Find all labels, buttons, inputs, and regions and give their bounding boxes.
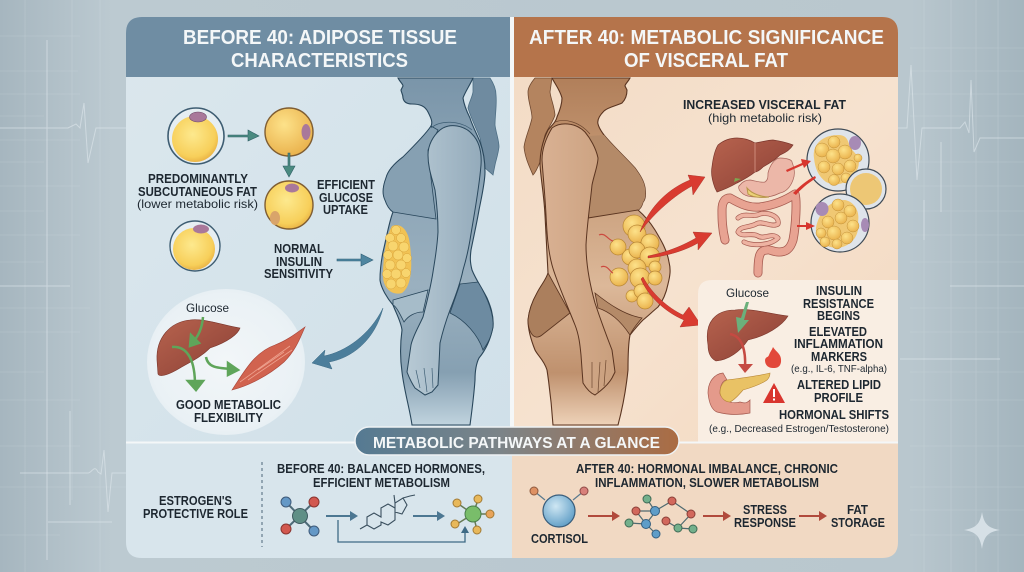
arrow: to inset [312, 308, 383, 369]
icon: intestine [722, 194, 796, 273]
label: fat storage: FAT [847, 503, 868, 517]
label: glucose uptake: GLUCOSE [319, 191, 373, 205]
label: after 40 pathway: INFLAMMATION, SLOWER METABOLISM [595, 476, 819, 490]
label: lipid profile: ALTERED LIPID [797, 378, 881, 392]
label: before 40 pathway [277, 462, 485, 490]
label: stress response: RESPONSE [734, 516, 796, 530]
inset: visceral cells bottom [811, 194, 869, 252]
arrow [326, 511, 358, 521]
arm [407, 126, 481, 395]
banner: metabolic pathways: METABOLIC PATHWAYS AT A GLANCE [373, 435, 660, 452]
garment [588, 135, 645, 218]
molecule: end [451, 495, 494, 534]
arrow: fat to liver [640, 175, 705, 232]
label: stress response: STRESS [743, 503, 787, 517]
arrow [413, 511, 445, 521]
fat deposit: after 40 [610, 215, 662, 309]
briefs front [393, 290, 428, 322]
icon: stomach [739, 158, 794, 197]
label: hormonal shifts: HORMONAL SHIFTS [779, 408, 889, 422]
label: insulin sensitivity: NORMAL [274, 242, 324, 256]
label: increased visceral fat [683, 98, 846, 125]
briefs front [595, 293, 642, 335]
fat cell [168, 108, 224, 164]
label: insulin resistance: BEGINS [817, 309, 860, 323]
arrow: fat to risk panel [641, 277, 701, 327]
inset: visceral cell small [846, 169, 886, 209]
icon: warning [763, 383, 785, 403]
icon: gallbladder [747, 188, 769, 197]
label: insulin sensitivity: INSULIN [276, 255, 322, 269]
garment [383, 126, 438, 219]
arrow [588, 511, 620, 521]
small red lines on fat [599, 234, 613, 273]
label: insulin resistance [803, 284, 874, 323]
label: estrogen role: ESTROGEN'S [159, 494, 232, 508]
fat cell [170, 221, 220, 271]
icon: flame [765, 347, 781, 368]
icon: liver [712, 138, 793, 192]
label: glucose uptake [317, 178, 375, 217]
label: glucose: Glucose [726, 286, 769, 300]
icon: liver [157, 320, 240, 376]
icon: muscle [232, 327, 305, 390]
label: inflammation: INFLAMMATION [794, 337, 883, 351]
arrows: glucose and insulin [730, 302, 753, 373]
arrow [228, 130, 259, 141]
arrow [799, 511, 827, 521]
fat deposit: before 40 [382, 225, 412, 294]
label: insulin sensitivity: SENSITIVITY [264, 267, 334, 281]
label: subcutaneous fat: SUBCUTANEOUS FAT [138, 185, 257, 199]
arrow [283, 153, 295, 177]
label: estrogen role: PROTECTIVE ROLE [143, 507, 248, 521]
label: before 40 pathway: BEFORE 40: BALANCED HORMONES, [277, 462, 485, 476]
sparkle [964, 512, 1000, 549]
label: hormonal shifts: (e.g., Decreased Estrogen/Testosterone) [709, 423, 889, 435]
header: after 40: OF VISCERAL FAT [624, 50, 788, 72]
label: subcutaneous fat [137, 172, 258, 211]
arrow: fat to intestine [648, 232, 712, 258]
hip [450, 282, 493, 350]
arrow: feedback loop [338, 520, 469, 542]
arrows: glucose flow [172, 317, 238, 390]
icon: liver [707, 310, 788, 361]
ponytail [524, 78, 555, 175]
icon: pancreas [708, 373, 770, 414]
hip [528, 273, 570, 337]
banner: metabolic pathways [355, 427, 679, 455]
panel: metabolic risks [698, 280, 898, 442]
body [528, 78, 670, 425]
label: inflammation [791, 325, 887, 375]
label: after 40 pathway: AFTER 40: HORMONAL IMBALANCE, CHRONIC [576, 462, 838, 476]
inset: visceral cells top [807, 129, 869, 191]
arrow [337, 254, 373, 266]
label: inflammation: MARKERS [811, 350, 867, 364]
panel: after 40 [512, 77, 898, 558]
label: insulin resistance: INSULIN [816, 284, 862, 298]
label: estrogen role [143, 494, 248, 521]
label: inflammation: (e.g., IL-6, TNF-alpha) [791, 363, 887, 375]
organs: liver stomach intestine [712, 129, 886, 273]
label: fat storage [831, 503, 885, 530]
label: glucose: Glucose [186, 301, 229, 315]
label: inflammation: ELEVATED [809, 325, 867, 339]
label: increased visceral fat: INCREASED VISCERAL FAT [683, 98, 846, 112]
panel: before 40 [126, 17, 512, 558]
label: fat storage: STORAGE [831, 516, 885, 530]
body [380, 78, 493, 425]
header: after 40 [514, 17, 898, 77]
label: insulin resistance: RESISTANCE [803, 297, 874, 311]
label: subcutaneous fat: (lower metabolic risk) [137, 197, 258, 211]
arrow [703, 511, 731, 521]
arm [542, 124, 615, 395]
label: before 40 pathway: EFFICIENT METABOLISM [313, 476, 450, 490]
label: glucose uptake: UPTAKE [323, 203, 368, 217]
fat cell [265, 108, 313, 156]
icon: cortisol [530, 487, 588, 546]
label: stress response [734, 503, 796, 530]
header: before 40 [126, 17, 510, 77]
label: metabolic flexibility: GOOD METABOLIC [176, 398, 281, 412]
label: subcutaneous fat: PREDOMINANTLY [148, 172, 249, 186]
molecule network [625, 495, 697, 538]
label: metabolic flexibility: FLEXIBILITY [194, 411, 264, 425]
label: glucose uptake: EFFICIENT [317, 178, 375, 192]
fat cell [265, 181, 313, 229]
header: before 40: CHARACTERISTICS [231, 50, 408, 72]
ponytail [468, 78, 499, 175]
header: before 40: BEFORE 40: ADIPOSE TISSUE [183, 27, 457, 49]
label: metabolic flexibility [176, 398, 281, 425]
molecule: start [281, 497, 319, 536]
label: increased visceral fat: (high metabolic risk) [708, 111, 822, 125]
label: lipid profile: PROFILE [814, 391, 863, 405]
header: after 40: AFTER 40: METABOLIC SIGNIFICANCE [529, 27, 884, 49]
inset: metabolic flexibility [147, 289, 305, 435]
small arrows [786, 159, 816, 230]
label: after 40 pathway [576, 462, 838, 490]
icon: cortisol: CORTISOL [531, 532, 588, 546]
figure: woman before 40 [380, 78, 499, 425]
label: insulin sensitivity [264, 242, 334, 281]
molecule: steroid [360, 495, 415, 529]
figure: woman after 40 [524, 78, 670, 425]
label: lipid profile [797, 378, 881, 405]
label: hormonal shifts [709, 408, 889, 435]
